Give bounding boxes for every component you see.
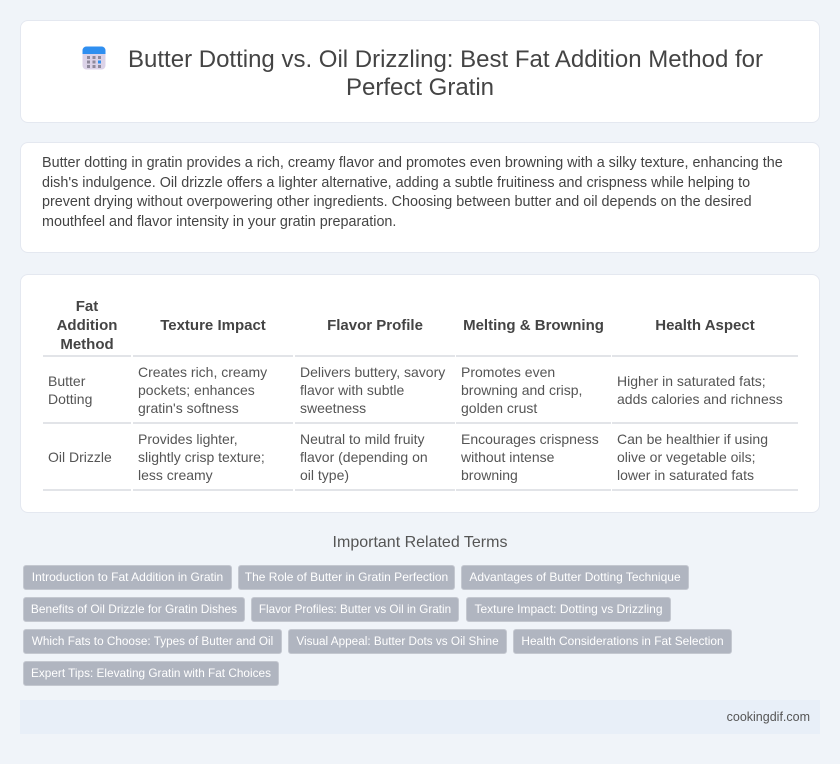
panel: title <box>20 20 820 123</box>
table row: butter dotting: pockets; enhances <box>138 382 255 398</box>
text block: description: mouthfeel and flavor intensity in your gratin preparation. <box>42 214 396 230</box>
panel: description <box>20 142 820 253</box>
table row: oil drizzle: Can be healthier if using <box>617 431 768 447</box>
tag <box>23 629 282 654</box>
tag: Which Fats to Choose: Types of Butter and Oil <box>32 635 273 648</box>
tag <box>513 629 732 654</box>
tag: Introduction to Fat Addition in Gratin <box>32 570 223 584</box>
table row: butter dotting: Higher in saturated fats; <box>617 373 766 389</box>
tag list: related terms <box>23 565 732 686</box>
table row: oil drizzle: Oil Drizzle <box>48 449 112 465</box>
title <box>128 46 763 101</box>
table row: oil drizzle: less creamy <box>138 467 213 483</box>
table row: butter dotting: Butter <box>48 373 85 389</box>
table row: butter dotting: gratin's softness <box>138 400 239 416</box>
header: texture impact: Texture Impact <box>160 317 266 334</box>
text block: description: prevent drying without overpowering other ingredients. Choosing between butter and oil depends on the desired <box>42 194 752 210</box>
tag: Flavor Profiles: Butter vs Oil in Gratin <box>259 603 451 616</box>
tag <box>23 565 232 590</box>
table row: oil drizzle: slightly crisp texture; <box>138 449 265 465</box>
table row: oil drizzle <box>48 431 768 483</box>
header: fat addition method <box>57 298 117 353</box>
tag: Expert Tips: Elevating Gratin with Fat Choices <box>31 666 271 680</box>
tag <box>23 597 245 622</box>
table row: butter dotting: golden crust <box>461 400 537 416</box>
table row: butter dotting: Dotting <box>48 391 92 407</box>
icon: calendar <box>82 46 106 70</box>
tag <box>251 597 459 622</box>
text block: description: dish's indulgence. Oil drizzle offers a lighter alternative, adding a subtle fruitiness and crispness while helping to <box>42 174 750 190</box>
tag: Texture Impact: Dotting vs Drizzling <box>474 602 663 616</box>
footer bar <box>20 700 820 734</box>
table row: oil drizzle: browning <box>461 467 518 483</box>
table row: butter dotting: browning and crisp, <box>461 382 582 398</box>
table row: oil drizzle: flavor (depending on <box>300 449 428 465</box>
tag <box>23 661 279 686</box>
title: Perfect Gratin <box>346 74 494 101</box>
tag <box>461 565 689 590</box>
table row: butter dotting: Promotes even <box>461 364 555 380</box>
table row: oil drizzle: Encourages crispness <box>461 431 599 447</box>
table row: butter dotting <box>48 364 783 416</box>
table row: butter dotting: sweetness <box>300 400 366 416</box>
tag: Advantages of Butter Dotting Technique <box>469 570 681 584</box>
heading: related terms: Important Related Terms <box>333 534 507 551</box>
table row: butter dotting: adds calories and richness <box>617 391 783 407</box>
table row: oil drizzle: Provides lighter, <box>138 431 238 447</box>
tag <box>238 565 455 590</box>
table row: oil drizzle: olive or vegetable oils; <box>617 449 756 465</box>
tag: The Role of Butter in Gratin Perfection <box>245 570 448 584</box>
table row: butter dotting: Delivers buttery, savory <box>300 364 445 380</box>
tag <box>288 629 507 654</box>
tag: Visual Appeal: Butter Dots vs Oil Shine <box>296 635 499 648</box>
header: fat addition method: Method <box>60 336 114 353</box>
table row: oil drizzle: Neutral to mild fruity <box>300 431 424 447</box>
header: flavor profile: Flavor Profile <box>327 317 423 334</box>
panel: comparison table <box>20 274 820 513</box>
header: fat addition method: Fat <box>76 298 98 315</box>
footer text: source: cookingdif.com <box>727 710 810 724</box>
table row: oil drizzle: without intense <box>461 449 554 465</box>
table row: butter dotting: flavor with subtle <box>300 382 404 398</box>
title: Butter Dotting vs. Oil Drizzling: Best Fat Addition Method for <box>128 46 763 73</box>
table header <box>57 298 755 353</box>
text block: description <box>42 155 783 230</box>
header: melting and browning: Melting & Browning <box>463 317 604 334</box>
tag <box>466 597 671 622</box>
table row: butter dotting: Creates rich, creamy <box>138 364 267 380</box>
table row: oil drizzle: oil type) <box>300 467 349 483</box>
header: health aspect: Health Aspect <box>655 317 755 334</box>
table row: oil drizzle: lower in saturated fats <box>617 467 754 483</box>
header: fat addition method: Addition <box>57 317 117 334</box>
tag: Benefits of Oil Drizzle for Gratin Dishes <box>31 602 237 616</box>
text block: description: Butter dotting in gratin provides a rich, creamy flavor and promotes even browning with a silky texture, enhancing the <box>42 155 783 171</box>
tag: Health Considerations in Fat Selection <box>521 634 724 648</box>
